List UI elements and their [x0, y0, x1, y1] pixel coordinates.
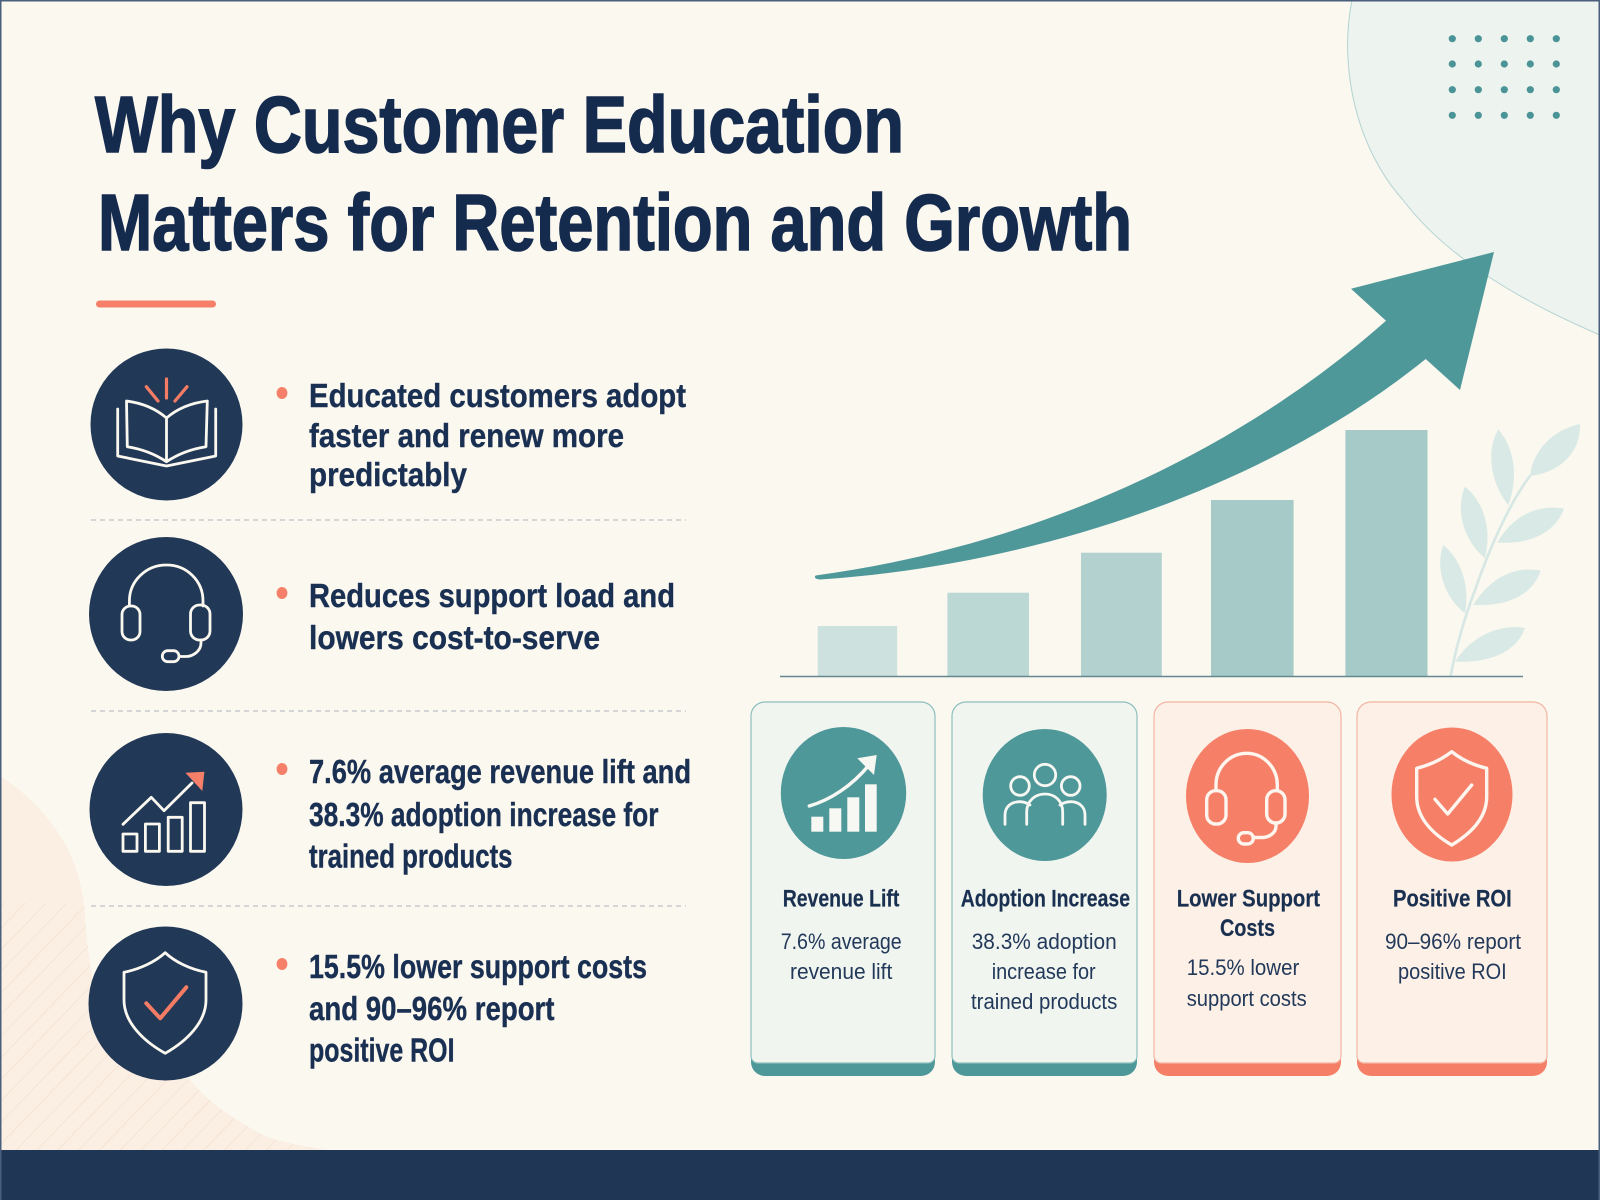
bullet text: Reduces support load and	[309, 577, 675, 614]
title accent underline	[96, 300, 216, 308]
icon: headset	[89, 537, 243, 691]
bullet text: Educated customers adopt	[309, 377, 686, 414]
title: Why Customer Education	[95, 80, 904, 169]
bullet dot	[277, 763, 287, 775]
growth arrow	[815, 252, 1494, 580]
card text	[1385, 929, 1522, 984]
card text: trained products	[971, 989, 1117, 1014]
card title	[1177, 886, 1320, 942]
bar 5	[1345, 430, 1428, 676]
list item: adoption and renewal	[90, 348, 686, 500]
card text: support costs	[1187, 986, 1307, 1011]
bullet text: trained products	[309, 838, 512, 874]
card text: 15.5% lower	[1187, 955, 1300, 980]
decorative blob: bottom left with hatching	[0, 770, 340, 1150]
bullet text: 38.3% adoption increase for	[309, 796, 659, 833]
card: positive ROI	[1357, 702, 1547, 1076]
card: adoption increase	[952, 702, 1137, 1076]
card text: increase for	[992, 959, 1096, 984]
card text: revenue lift	[790, 959, 893, 984]
bullet text: and 90–96% report	[309, 990, 554, 1027]
card text: 90–96% report	[1385, 929, 1522, 954]
decorative dot grid	[1449, 35, 1560, 119]
icon: open book	[90, 348, 242, 500]
bar 2	[947, 593, 1029, 676]
decorative blob: top right	[1348, 0, 1600, 335]
bullet text	[309, 948, 647, 1068]
bullet text: positive ROI	[309, 1032, 454, 1068]
chart baseline	[780, 676, 1523, 678]
card text	[1187, 955, 1307, 1011]
bullet dot	[277, 958, 287, 970]
bullet dot	[277, 387, 287, 399]
bar 1	[818, 626, 897, 676]
icon: shield with check	[88, 926, 242, 1080]
title: Matters for Retention and Growth	[98, 178, 1132, 267]
card title: Lower Support	[1177, 886, 1320, 913]
bullet text	[309, 753, 691, 874]
list item: support costs and ROI	[88, 926, 647, 1080]
card text	[971, 929, 1117, 1014]
footer bar	[0, 1150, 1600, 1200]
bullet text: lowers cost-to-serve	[309, 619, 600, 656]
bullet text: 15.5% lower support costs	[309, 948, 647, 985]
plant decoration	[1440, 424, 1580, 676]
divider 3	[91, 905, 686, 907]
card: revenue lift	[751, 702, 935, 1076]
bar 4	[1211, 500, 1294, 676]
card text	[781, 929, 902, 984]
card title: Adoption Increase	[961, 886, 1130, 913]
card title: Positive ROI	[1393, 886, 1512, 913]
divider 2	[91, 710, 686, 712]
card title: Revenue Lift	[783, 886, 899, 913]
bullet dot	[277, 587, 287, 599]
list item: revenue and adoption	[90, 733, 691, 886]
title	[95, 80, 1132, 267]
icon: people	[983, 729, 1107, 861]
bullet text: 7.6% average revenue lift and	[309, 753, 691, 790]
icon: growth chart	[90, 733, 242, 886]
list item: support load	[89, 537, 675, 691]
card: lower support costs	[1154, 702, 1341, 1076]
icon: headset	[1186, 729, 1309, 863]
icon: shield check	[1392, 728, 1512, 862]
card text: 7.6% average	[781, 929, 902, 954]
divider 1	[91, 519, 686, 521]
bar 3	[1081, 553, 1162, 676]
card title: Costs	[1220, 915, 1275, 942]
card text: positive ROI	[1398, 959, 1507, 984]
bullet text: predictably	[309, 456, 468, 493]
icon: revenue chart	[781, 727, 906, 859]
bullet text: faster and renew more	[309, 417, 624, 454]
bar chart with growth arrow	[780, 252, 1580, 676]
bullet text	[309, 377, 686, 493]
card text: 38.3% adoption	[972, 929, 1117, 954]
bullet text	[309, 577, 675, 656]
